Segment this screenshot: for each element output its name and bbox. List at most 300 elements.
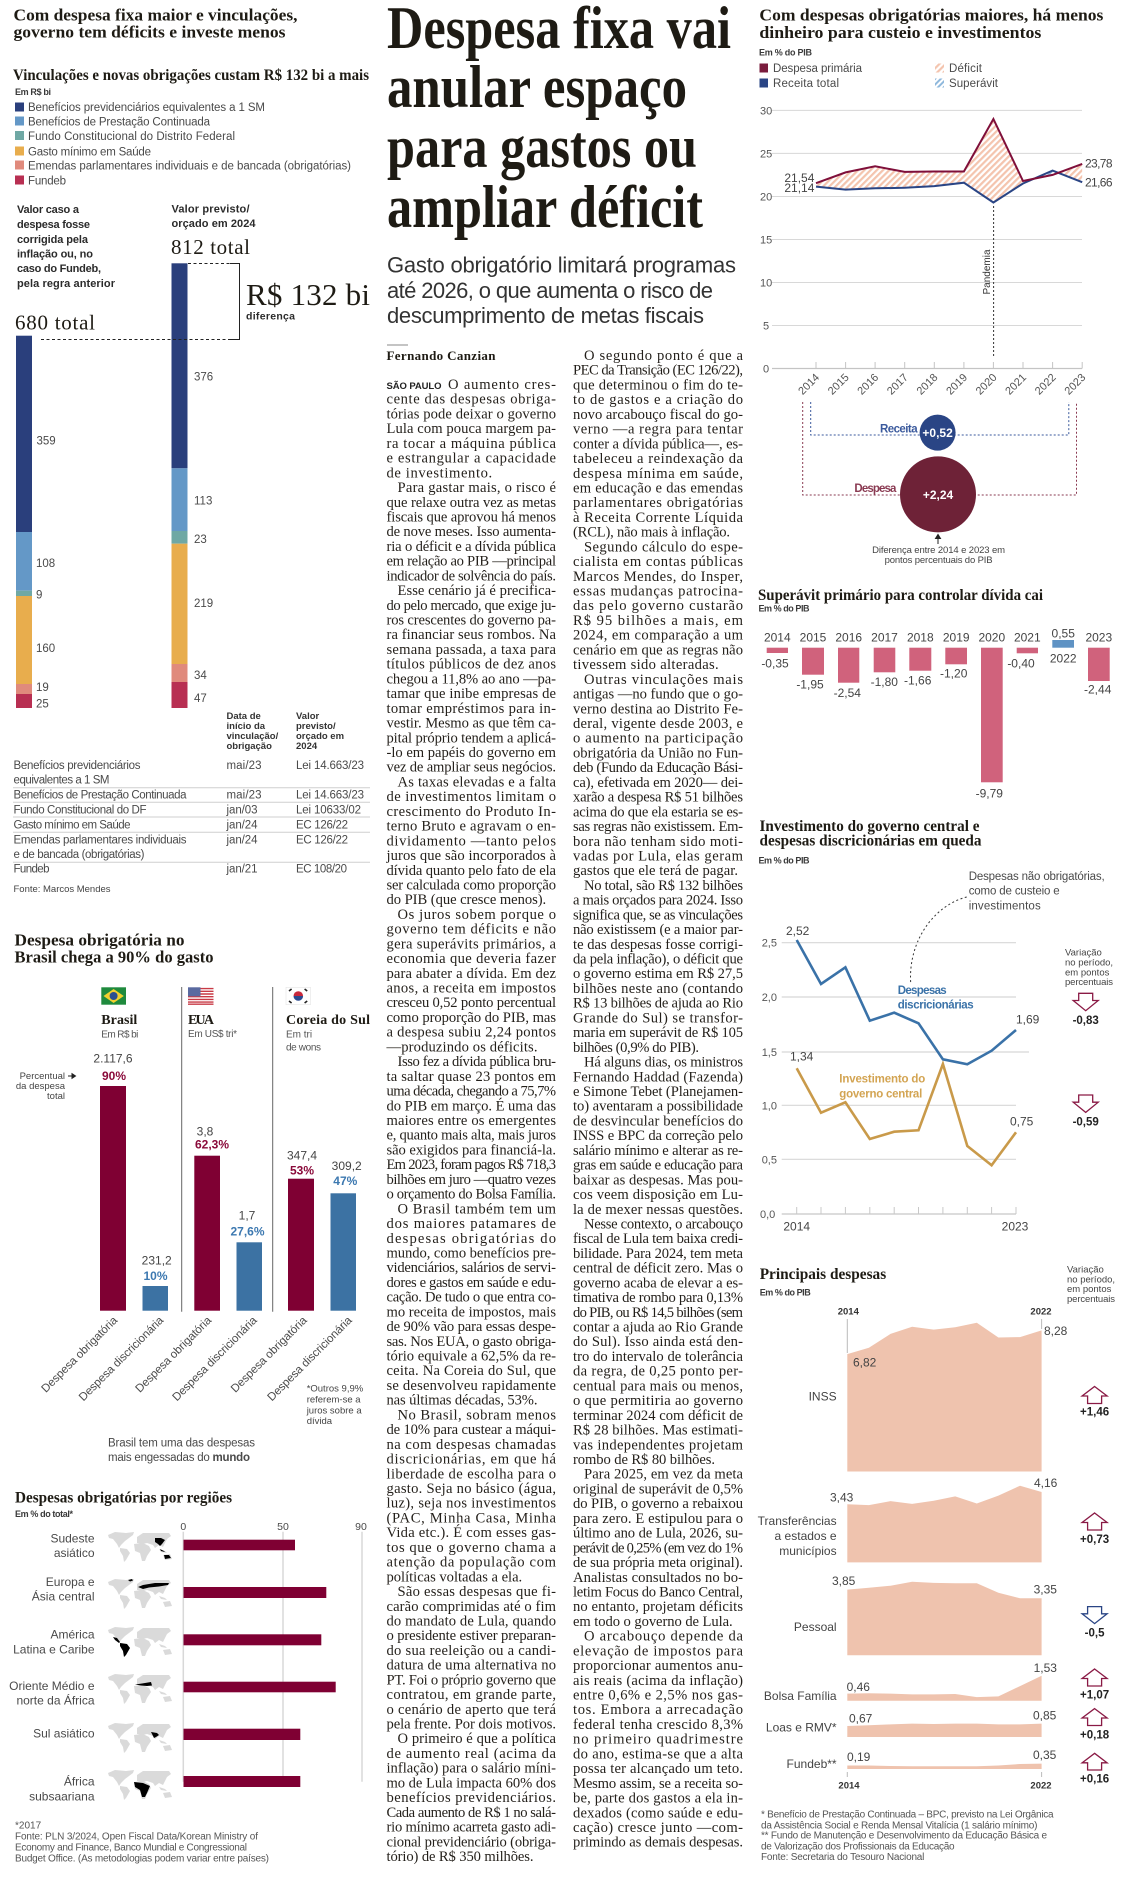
article text: first column: ta saltar quase 23 pontos em bbox=[386, 1069, 557, 1085]
area chart: Fundeb: 0,35 bbox=[1033, 1748, 1057, 1762]
bar chart: surplus by year: 2017 bbox=[871, 631, 898, 645]
arrow: -0,5 bbox=[1082, 1607, 1107, 1640]
column heading: budgeted value: orçado em 2024 bbox=[172, 218, 256, 230]
arrow: +1,46: +1,46 bbox=[1080, 1406, 1109, 1418]
column heading: inflation-corrected value: Valor caso a bbox=[17, 204, 80, 216]
line chart: expense and revenue: 21,54 bbox=[784, 171, 815, 185]
diagram: difference bubbles: pontos percentuais do PIB bbox=[885, 555, 993, 566]
table of obligations: Gasto mínimo em Saúde bbox=[14, 819, 130, 831]
icon: map Middle East and North Africa bbox=[108, 1674, 172, 1704]
year labels bottom: 2014 bbox=[838, 1780, 860, 1792]
article text: second column: cenário em que as regras não bbox=[573, 642, 743, 658]
table of obligations bbox=[13, 711, 370, 876]
panel: vinculações and new obligations bbox=[13, 6, 370, 895]
panel: mandatory spending by region bbox=[9, 1490, 367, 1864]
footnote: outros 9,9%: *Outros 9,9% bbox=[307, 1383, 364, 1394]
bar chart: surplus by year: -1,95 bbox=[796, 677, 824, 691]
region labels: Latina e Caribe bbox=[13, 1642, 95, 1656]
footnotes and source: Fonte: Secretaria do Tesouro Nacional bbox=[761, 1852, 924, 1863]
bar chart: surplus by year: -0,40 bbox=[1007, 656, 1035, 670]
article text: second column: o governo estima em R$ 27,5 bbox=[573, 966, 743, 982]
article text: second column: significa que, se as vinculações bbox=[573, 907, 743, 923]
area chart: Loas e RMV: 0,67 bbox=[849, 1712, 873, 1726]
article text: first column: rio mínimo acarreta gasto adi- bbox=[386, 1820, 556, 1836]
legend bbox=[760, 63, 999, 90]
article text: first column: inflação) para o salário míni- bbox=[386, 1761, 556, 1777]
stacked bar: 812 total: 34 bbox=[194, 670, 207, 682]
table of obligations: jan/24 bbox=[226, 834, 258, 846]
stacked bar: 680 total: 9 bbox=[36, 590, 42, 602]
line chart: expense and revenue: 2023 bbox=[1063, 372, 1088, 397]
article text: second column: deb (Fundo da Educação Bási- bbox=[573, 760, 743, 776]
article text: first column: de nove meses. Isso aumenta- bbox=[386, 524, 556, 540]
source notes: *2017 bbox=[15, 1820, 42, 1831]
article text: first column: gera superávits primários, a bbox=[386, 936, 557, 952]
article text: first column: para abater a dívida. Em dez bbox=[386, 966, 557, 982]
label: despesas discricionárias bbox=[898, 985, 974, 1012]
article text: first column: Cada aumento de R$ 1 no salá- bbox=[386, 1805, 556, 1821]
stacked bar: 812 total: 23 bbox=[194, 534, 207, 546]
article text: second column: vadas por Lula, elas geram bbox=[573, 848, 744, 864]
article text: first column bbox=[386, 377, 557, 1865]
line chart: investment and discretionary: 2,5 bbox=[762, 938, 777, 950]
line chart: expense and revenue: 5 bbox=[763, 320, 769, 332]
region labels: asiático bbox=[54, 1546, 95, 1560]
line chart: expense and revenue: 2020 bbox=[974, 372, 1000, 397]
caption: Brasil tem uma das despesas bbox=[108, 1438, 255, 1450]
bar chart: mandatory vs discretionary: 231,2 bbox=[142, 1254, 172, 1268]
callout: non-mandatory spending: Despesas não obrigatórias, bbox=[969, 871, 1105, 883]
footnotes and source: da Assistência Social e Renda Mensal Vitalícia (1 salário mínimo) bbox=[761, 1820, 1038, 1831]
stacked bar: 812 total: 376 bbox=[194, 372, 213, 384]
icon: US flag bbox=[188, 987, 214, 1005]
legend: Fundo Constitucional do Distrito Federal bbox=[28, 131, 235, 143]
bar chart: surplus by year: 0,55 bbox=[1052, 626, 1075, 640]
article text: second column: da pela inflação), o déficit que bbox=[573, 952, 743, 968]
article text: second column: cação) cresce junto —com- bbox=[573, 1820, 743, 1836]
bar chart: mandatory vs discretionary: 27,6% bbox=[230, 1224, 265, 1238]
column labels: Em R$ bi bbox=[101, 1029, 138, 1040]
article text: second column: Marcos Mendes, do Insper, bbox=[573, 569, 743, 585]
region labels: subsaariana bbox=[29, 1789, 95, 1803]
icon: map Latin America bbox=[108, 1627, 172, 1657]
article text: first column: gasto. Seja no básico (água, bbox=[386, 1481, 556, 1497]
stacked bar: 812 total: 47 bbox=[194, 693, 207, 705]
article text: first column: cente das despesas obriga- bbox=[386, 392, 556, 408]
label: investimento do governo central bbox=[839, 1074, 925, 1101]
legend: Gasto mínimo em Saúde bbox=[28, 146, 151, 158]
stacked bar: 812 total bbox=[172, 263, 213, 708]
bar chart: mandatory vs discretionary: 10% bbox=[143, 1269, 168, 1283]
article text: first column: de 90% vão para essas despe- bbox=[386, 1319, 556, 1335]
table of obligations: vinculação/ bbox=[226, 731, 279, 742]
callout: non-mandatory spending bbox=[911, 871, 1105, 983]
article text: first column: economia que deveria fazer bbox=[386, 951, 556, 967]
bar chart: surplus by year: 2022 bbox=[1050, 652, 1077, 666]
subheadline bbox=[387, 253, 736, 328]
table of obligations: 2024 bbox=[296, 741, 318, 752]
column heading: inflation-corrected value: caso do Fundeb, bbox=[17, 263, 101, 275]
article text: first column: São essas despesas que fi- bbox=[398, 1584, 556, 1600]
arrow: investment down bbox=[1073, 1095, 1099, 1129]
article text: first column: tórias pode deixar o governo bbox=[386, 406, 556, 422]
arrow: +1,07 bbox=[1080, 1669, 1109, 1702]
article text: second column: não existissem (e a maior par- bbox=[573, 922, 743, 938]
article text: first column: governo tem déficits e não bbox=[386, 922, 556, 938]
subheadline: até 2026, o que aumenta o risco de bbox=[387, 278, 713, 303]
area chart: INSS: INSS bbox=[809, 1389, 837, 1403]
table of obligations: jan/24 bbox=[226, 819, 258, 831]
legend: Benefícios previdenciários equivalentes a 1 SM bbox=[28, 102, 265, 114]
article text: first column: tório) de R$ 350 milhões. bbox=[386, 1849, 534, 1865]
area chart: Loas e RMV: 0,85 bbox=[1033, 1708, 1057, 1722]
table of obligations: Benefícios de Prestação Continuada bbox=[14, 790, 187, 802]
heading: com despesa fixa maior: governo tem déficits e investe menos bbox=[14, 22, 286, 42]
article text: second column: despesa mínima em saúde, bbox=[573, 466, 743, 482]
bar chart: surplus by year: -1,20 bbox=[940, 667, 968, 681]
diagram: difference bubbles bbox=[803, 402, 1076, 566]
article text: first column: cresceu 0,52 ponto percentual bbox=[386, 995, 556, 1011]
article text: second column: perávit de 0,25% (em vez do 1% bbox=[573, 1540, 743, 1556]
byline: Fernando Canzian bbox=[386, 348, 496, 363]
article text: second column: Segundo cálculo do espe- bbox=[584, 539, 743, 555]
article text: second column: ais reais (acima da inflação) bbox=[573, 1673, 743, 1689]
article text: first column: nas últimas décadas, 53%. bbox=[386, 1393, 538, 1409]
table of obligations: EC 126/22 bbox=[296, 834, 348, 846]
axis bbox=[180, 1521, 367, 1782]
article text: first column: semana passada, a taxa para bbox=[386, 642, 557, 658]
line chart: expense and revenue: 23,78 bbox=[1085, 156, 1113, 170]
article text: first column: indicador de solvência do país. bbox=[386, 568, 556, 584]
column heading: inflation-corrected value bbox=[17, 204, 116, 290]
article text: first column: ra financiar seus rombos. Na bbox=[386, 627, 557, 643]
article text: second column: Mesmo assim, se a receita so- bbox=[573, 1776, 743, 1792]
article text: second column: tos. Embora a arrecadação bbox=[573, 1702, 743, 1718]
article text: second column: federal tenha crescido 8,3% bbox=[573, 1717, 743, 1733]
article text: first column: tos que o governo chama a bbox=[386, 1540, 557, 1556]
article text: second column: possa ter alcançado um teto. bbox=[573, 1761, 743, 1777]
line chart: expense and revenue: 2015 bbox=[826, 372, 852, 397]
article text: first column: mo receita de impostos, mais bbox=[386, 1304, 556, 1320]
panel: investment and discretionary spending bbox=[758, 818, 1113, 1234]
article text: second column: PEC da Transição (EC 126/22), bbox=[573, 363, 743, 379]
footnote: outros 9,9% bbox=[306, 1383, 364, 1427]
table of obligations: EC 126/22 bbox=[296, 819, 348, 831]
article text: first column: do pelo mercado, que exige ju- bbox=[386, 598, 556, 614]
arrow: discretionary down bbox=[1073, 993, 1099, 1027]
article text: second column: novo arcabouço fiscal do go- bbox=[573, 407, 743, 423]
article text: second column: bilhões neste ano (contando bbox=[573, 981, 743, 997]
table of obligations: mai/23 bbox=[226, 760, 262, 772]
column labels: Brasil bbox=[101, 1013, 137, 1028]
article text: second column: maria em superávit de R$ 105 bbox=[573, 1025, 743, 1041]
caption bbox=[108, 1438, 255, 1464]
article text: first column: crescimento do Produto In- bbox=[386, 804, 556, 820]
line chart: expense and revenue: 0 bbox=[763, 364, 769, 376]
article text: first column: bilhões em juro —quatro vezes bbox=[386, 1172, 556, 1188]
bar chart: surplus by year: 2019 bbox=[943, 631, 970, 645]
annotation: percentual da despesa total: da despesa bbox=[16, 1081, 66, 1092]
subheadline: Gasto obrigatório limitará programas bbox=[387, 253, 736, 278]
line chart: investment and discretionary: 2014 bbox=[783, 1220, 810, 1234]
article text: first column: o orçamento do Bolsa Família. bbox=[386, 1187, 556, 1203]
bar chart: mandatory vs discretionary: 90% bbox=[102, 1069, 126, 1083]
article text: first column: de 10% para custear a máqui- bbox=[386, 1422, 556, 1438]
article text: second column: verno destina ao Distrito Fe- bbox=[573, 701, 743, 717]
arrow: +0,18: +0,18 bbox=[1080, 1729, 1110, 1741]
line chart: investment and discretionary: 0,5 bbox=[762, 1154, 777, 1166]
area chart: Fundeb: 0,19 bbox=[847, 1750, 871, 1764]
icon: map Sub-Saharan Africa bbox=[108, 1770, 172, 1800]
axis: 50 bbox=[277, 1521, 289, 1533]
icon: map South Asia bbox=[108, 1723, 172, 1753]
legend: Benefícios de Prestação Continuada bbox=[28, 116, 211, 128]
article text: first column: maiores entre os emergentes bbox=[386, 1113, 556, 1129]
article text: second column: baixar as despesas. Mas pou- bbox=[573, 1172, 743, 1188]
article text: second column: Nesse contexto, o arcabouço bbox=[584, 1216, 743, 1232]
bar chart: surplus by year: 2014 bbox=[764, 631, 791, 645]
article text: first column: se desenvolveu rapidamente bbox=[386, 1378, 556, 1394]
variation column heading: no período, bbox=[1067, 1275, 1115, 1286]
article text: second column: entre 0,6% e 2,5% nos gas- bbox=[573, 1688, 743, 1704]
stacked bar: 812 total: 219 bbox=[194, 598, 213, 610]
region labels: Sudeste bbox=[50, 1531, 95, 1545]
article text: second column: e Simone Tebet (Planejamen- bbox=[573, 1084, 743, 1100]
line chart: investment and discretionary: 1,5 bbox=[762, 1047, 777, 1059]
diagram: difference bubbles: +0,52 bbox=[922, 426, 953, 440]
diagram: difference bubbles: +2,24 bbox=[923, 488, 954, 502]
article text: second column: fiscal de Lula tem baixa credi- bbox=[573, 1231, 743, 1247]
label: despesas discricionárias: discricionárias bbox=[898, 1000, 974, 1012]
arrow: +1,07: +1,07 bbox=[1080, 1690, 1109, 1702]
unit label: Em % do PIB bbox=[760, 1288, 811, 1298]
article text: first column: fiscais que aprovou há menos bbox=[386, 510, 556, 526]
column labels: EUA bbox=[188, 1013, 215, 1028]
article text: second column: central de déficit zero. Mas o bbox=[573, 1261, 743, 1277]
panel: primary surplus bbox=[758, 587, 1112, 800]
article text: first column: políticas voltadas a ela. bbox=[386, 1569, 522, 1585]
arrow: +0,16 bbox=[1080, 1753, 1109, 1786]
article text: first column: são exigidos para financiá-la. bbox=[386, 1142, 556, 1158]
article text: second column: governo acaba de elevar a es- bbox=[573, 1275, 743, 1291]
main headline bbox=[387, 0, 731, 240]
variation column heading: percentuais bbox=[1065, 977, 1113, 988]
region labels: Europa e bbox=[46, 1575, 95, 1589]
article text: second column: bora não tenham sido moti- bbox=[573, 834, 743, 850]
area chart: transfers: Transferências bbox=[758, 1514, 837, 1528]
article text: second column: a mais orçados para 2024. Isso bbox=[573, 893, 743, 909]
line chart: expense and revenue: 2018 bbox=[915, 372, 940, 397]
article text: second column: no primeiro quadrimestre bbox=[573, 1732, 743, 1748]
heading: Despesas obrigatórias por regiões bbox=[15, 1490, 232, 1507]
variation column heading: Variação bbox=[1067, 1265, 1104, 1276]
article text: first column: SÃO PAULO bbox=[386, 381, 442, 392]
line chart: investment and discretionary bbox=[760, 924, 1040, 1234]
article text: first column: O primeiro é que a política bbox=[398, 1731, 557, 1747]
article text: second column: Há alguns dias, os ministros bbox=[584, 1055, 743, 1071]
unit label: Em R$ bi bbox=[15, 87, 51, 97]
article text: second column: gastos que ele terá de pagar. bbox=[573, 863, 738, 879]
table of obligations: Benefícios previdenciários bbox=[14, 760, 141, 772]
article text: first column: de aumento real (acima da bbox=[386, 1746, 557, 1762]
callout: non-mandatory spending: como de custeio e bbox=[969, 886, 1060, 898]
article text: second column: Analistas consultados no bo- bbox=[573, 1570, 743, 1586]
label: investimento do governo central: governo central bbox=[839, 1089, 922, 1101]
table of obligations: Fundeb bbox=[14, 864, 50, 876]
arrow: +0,73 bbox=[1080, 1513, 1109, 1546]
icon: Brazil flag bbox=[101, 987, 126, 1005]
article text: first column: No Brasil, sobram menos bbox=[398, 1407, 556, 1423]
article text: first column: tamar que inibe empresas de bbox=[386, 686, 556, 702]
article text: second column: antigas —no fundo que o go- bbox=[573, 687, 743, 703]
column labels: Coreia do Sul bbox=[286, 1013, 370, 1028]
unit label: Em % do total* bbox=[15, 1509, 73, 1519]
article text: second column: do PIB, o governo a rebaixou bbox=[573, 1496, 744, 1512]
bar chart: mandatory vs discretionary: 47% bbox=[333, 1174, 358, 1188]
article text: second column: vas independentes projetam bbox=[573, 1437, 744, 1453]
diagram: difference bubbles: Diferença entre 2014 e 2023 em bbox=[872, 545, 1005, 556]
article text: second column: tabeleceu a reindexação da bbox=[573, 451, 744, 467]
label: investimento do governo central: Investimento do bbox=[839, 1074, 925, 1086]
article text: second column: letim Focus do Banco Central, bbox=[573, 1584, 743, 1600]
article text: first column: de investimentos limitam o bbox=[386, 789, 556, 805]
article text: second column: acima do que ela estaria se es- bbox=[573, 804, 743, 820]
bar chart: mandatory vs discretionary: 347,4 bbox=[287, 1148, 317, 1162]
line chart: expense and revenue: 2019 bbox=[944, 372, 970, 397]
diagram: difference bubbles: Despesa bbox=[854, 483, 897, 495]
article text: first column: e, quanto mais alta, mais juros bbox=[386, 1128, 556, 1144]
unit label: Em % do PIB bbox=[758, 855, 810, 865]
rotated axis labels: Despesa obrigatória bbox=[40, 1314, 121, 1395]
area chart: personnel: Pessoal bbox=[794, 1620, 837, 1634]
icon: map southeast Asia bbox=[108, 1532, 172, 1562]
year labels top: 2022 bbox=[1030, 1306, 1052, 1318]
article text: second column: 2024, em comparação a um bbox=[573, 628, 744, 644]
article text: first column: de investimento. bbox=[386, 465, 492, 481]
line chart: expense and revenue: 30 bbox=[760, 105, 772, 117]
article text: second column: do PIB, ou R$ 14,5 bilhões (sem bbox=[573, 1305, 744, 1321]
annotation: pandemia: Pandemia bbox=[982, 249, 993, 295]
arrow: +1,46 bbox=[1080, 1386, 1109, 1418]
panel: main expenses bbox=[758, 1265, 1115, 1863]
bar chart: mandatory vs discretionary: 2.117,6 bbox=[93, 1052, 133, 1066]
rotated axis labels: Despesa discricionária bbox=[77, 1314, 167, 1404]
article text: second column: do Sul). Isso ainda está den- bbox=[573, 1334, 743, 1350]
arrow: +0,73: +0,73 bbox=[1080, 1534, 1109, 1546]
footnote: outros 9,9%: referem-se a bbox=[307, 1394, 361, 1405]
table of obligations: e de bancada (obrigatórias) bbox=[14, 849, 145, 861]
callout: R$ 132 bi: diferença bbox=[246, 310, 295, 322]
bar chart: mandatory vs discretionary: 3,8 bbox=[197, 1124, 214, 1138]
line chart: expense and revenue: 2016 bbox=[855, 372, 881, 397]
rotated axis labels: Despesa discricionária bbox=[171, 1314, 260, 1404]
bar chart: surplus by year: -0,35 bbox=[761, 656, 789, 670]
article text: second column: do ano, estima-se que a alta bbox=[573, 1746, 744, 1762]
heading: Despesa obrigatória no bbox=[14, 931, 184, 950]
area chart: Loas e RMV: Loas e RMV* bbox=[766, 1720, 837, 1734]
article text: first column: videnciários, salários de servi- bbox=[386, 1260, 556, 1276]
bar chart: surplus by year: 2018 bbox=[907, 631, 934, 645]
line chart: expense and revenue: 2014 bbox=[796, 372, 822, 397]
article text: second column: o aumento na participação bbox=[573, 731, 743, 747]
bar chart: mandatory vs discretionary: 53% bbox=[290, 1163, 314, 1177]
article text: first column: atenção da população com bbox=[386, 1555, 557, 1571]
source: Fonte: Marcos Mendes bbox=[14, 884, 111, 895]
article text: first column: cional previdenciário (obriga- bbox=[386, 1834, 556, 1850]
bar chart: mandatory vs discretionary: 62,3% bbox=[195, 1137, 229, 1151]
area chart: transfers bbox=[758, 1476, 1058, 1562]
article text: first column: ra tocar a máquina pública bbox=[386, 436, 557, 452]
article text: second column: O arcabouço depende da bbox=[584, 1629, 744, 1645]
article text: first column: ros crescentes do governo pa- bbox=[386, 612, 556, 628]
article text: first column: do sua reeleição ou a candi- bbox=[386, 1643, 556, 1659]
column heading: inflation-corrected value: inflação ou, no bbox=[17, 248, 93, 260]
bar chart: surplus by year: 2021 bbox=[1014, 631, 1041, 645]
article text: second column: da regra, de 0,25 ponto per- bbox=[573, 1364, 743, 1380]
stacked bar: 680 total: 359 bbox=[36, 436, 56, 448]
heading: Superávit primário para controlar dívida cai bbox=[758, 587, 1044, 604]
article text: second column: la de mexer nessas questões. bbox=[573, 1202, 743, 1218]
region labels: Oriente Médio e bbox=[9, 1679, 95, 1693]
article text: first column: vestir. Mesmo as que têm ca- bbox=[386, 716, 556, 732]
stacked bar: 680 total: 25 bbox=[36, 699, 49, 711]
article text: first column: dívida quanto pelo fato de ela bbox=[386, 863, 557, 879]
article text: second column: essas mudanças patrocina- bbox=[573, 584, 743, 600]
article text: first column: datura de uma alternativa no bbox=[386, 1658, 556, 1674]
area chart: Fundeb bbox=[787, 1748, 1057, 1771]
area chart: transfers: a estados e bbox=[775, 1529, 837, 1543]
line chart: investment and discretionary: 1,69 bbox=[1016, 1012, 1040, 1026]
article text: second column: primindo as demais despesas. bbox=[573, 1835, 743, 1851]
annotation: percentual da despesa total bbox=[16, 1071, 76, 1102]
arrow: +0,18 bbox=[1080, 1709, 1110, 1741]
article text: second column: obrigatória da União no Fun- bbox=[573, 745, 743, 761]
legend: Emendas parlamentares individuais e de bancada (obrigatórias) bbox=[28, 160, 351, 172]
article text: second column: gras em saúde e educação para bbox=[573, 1158, 744, 1174]
article text: second column: No total, são R$ 132 bilhões bbox=[584, 878, 743, 894]
region labels: Ásia central bbox=[32, 1589, 94, 1604]
article text: second column: Outras vinculações mais bbox=[584, 672, 743, 688]
article text: second column: elevação de impostos para bbox=[573, 1643, 744, 1659]
stacked bar: 812 total: 113 bbox=[194, 496, 212, 508]
year labels bottom: 2022 bbox=[1030, 1780, 1052, 1792]
article text: first column: contratou, em grande parte, bbox=[386, 1687, 556, 1703]
article text: second column: em todo o governo de Lula. bbox=[573, 1614, 733, 1630]
article text: second column: O segundo ponto é que a bbox=[584, 348, 744, 364]
line chart: investment and discretionary: 1,34 bbox=[790, 1050, 814, 1064]
article text: second column: proporcionar aumentos anu- bbox=[573, 1658, 743, 1674]
article text: second column: das pelo governo custarão bbox=[573, 598, 743, 614]
article text: second column: (RCL), não mais à inflação. bbox=[573, 525, 730, 541]
article text: first column: Os juros sobem porque o bbox=[398, 907, 556, 923]
article text: first column: juros que são incorporados à bbox=[386, 848, 557, 864]
legend: Déficit bbox=[949, 63, 983, 75]
article text: second column: à Receita Corrente Líquida bbox=[573, 510, 744, 526]
panel: mandatory spending comparison bbox=[14, 931, 370, 1464]
article text: second column: tivessem sido alteradas. bbox=[573, 657, 719, 673]
article text: second column: te das despesas fosse corrigi- bbox=[573, 937, 743, 953]
article text: first column: Para gastar mais, o risco é bbox=[398, 480, 556, 496]
area chart: transfers: 4,16 bbox=[1034, 1476, 1058, 1490]
article text: first column: cação. De tudo o que entra co- bbox=[386, 1290, 556, 1306]
line chart: investment and discretionary: 2,52 bbox=[786, 924, 810, 938]
article text: first column: vez de ampliar seus negócios. bbox=[386, 760, 556, 776]
table of obligations: Valor bbox=[296, 711, 320, 722]
table of obligations: Emendas parlamentares individuais bbox=[14, 834, 187, 846]
article text: second column: xarão a despesa R$ 51 bilhões bbox=[573, 790, 743, 806]
region labels: África bbox=[64, 1774, 95, 1789]
line chart: expense and revenue: 10 bbox=[760, 278, 772, 290]
